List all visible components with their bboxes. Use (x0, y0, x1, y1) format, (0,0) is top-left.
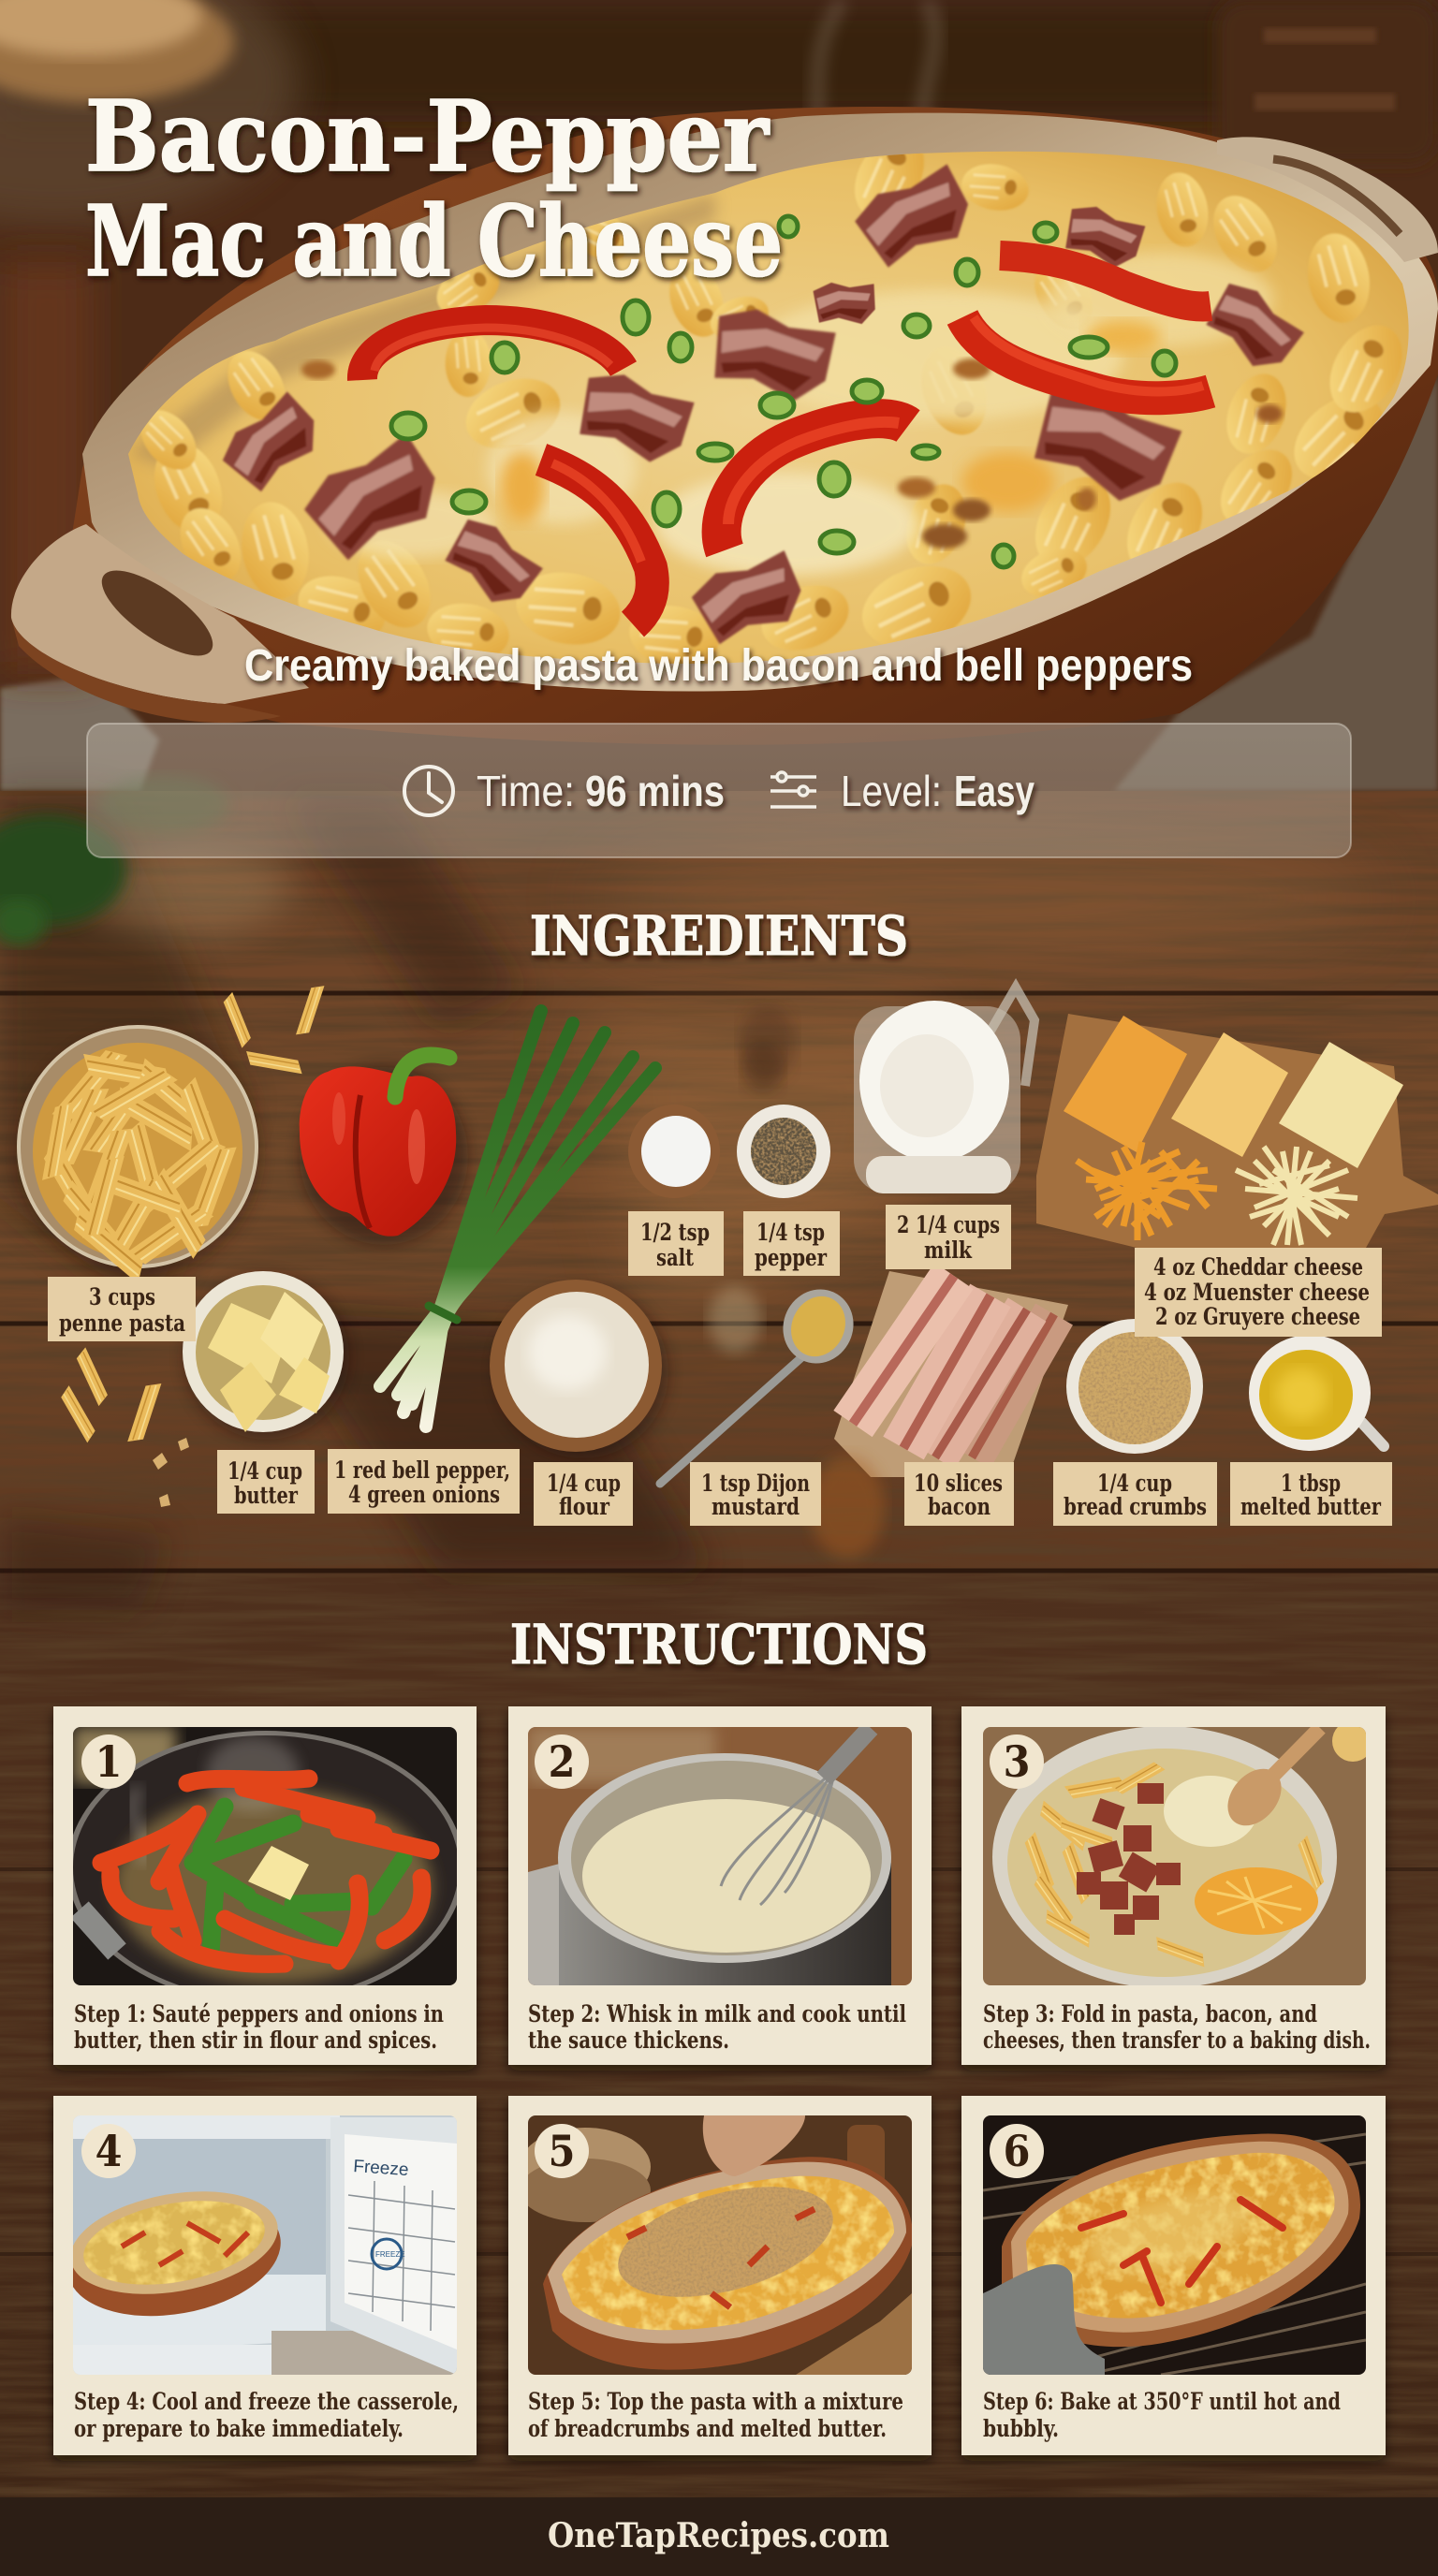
image: topping (520, 2115, 913, 2375)
caption: step 4 (74, 2388, 459, 2442)
badge 5: 5 (549, 2126, 575, 2176)
panel: step 2 (508, 1706, 932, 2065)
subtitle: Creamy baked pasta with bacon and bell peppers (244, 641, 1193, 691)
panel: step 1 (53, 1706, 477, 2065)
title (85, 79, 783, 299)
ingredient: cheese board (1036, 1014, 1438, 1248)
label: pepper: 1/4 tsp (756, 1219, 825, 1246)
label: bacon: 10 slices (914, 1470, 1003, 1497)
label: cheeses: 4 oz Cheddar cheese (1153, 1253, 1363, 1281)
badge 4: 4 (95, 2126, 122, 2176)
caption: step 5: Step 5: Top the pasta with a mixture (528, 2388, 903, 2415)
caption: step 1: Step 1: Sauté peppers and onions in (74, 2000, 444, 2027)
label: butter (217, 1450, 315, 1514)
handle left (11, 524, 309, 704)
label: butter: 1/4 cup (227, 1457, 302, 1485)
badge 6 (990, 2124, 1044, 2178)
label: pepper (743, 1211, 840, 1276)
panel: step 4 (53, 2096, 477, 2455)
muenster block (1171, 1032, 1288, 1157)
badge 3 (990, 1734, 1044, 1789)
step number badges (81, 1734, 1044, 2178)
ingredient: bread crumbs (1066, 1319, 1203, 1454)
level: Easy (954, 767, 1034, 815)
step captions (74, 2000, 1371, 2442)
badge 2: 2 (549, 1736, 575, 1787)
image: oven (983, 2115, 1366, 2375)
baked dish (11, 107, 1438, 745)
calendar: Freeze (353, 2157, 409, 2180)
panel: step 6 (961, 2096, 1386, 2455)
ingredient: green onions (380, 1011, 655, 1427)
title: Bacon-Pepper (85, 79, 770, 194)
badge 5 (535, 2124, 589, 2178)
level: Level: (841, 767, 942, 815)
label: penne (48, 1277, 196, 1341)
dish rim (82, 113, 1438, 691)
label: cheeses: 2 oz Gruyere cheese (1155, 1303, 1360, 1330)
ingredient: flour (490, 1280, 668, 1458)
time (477, 767, 725, 815)
image: pan (67, 1727, 464, 2004)
caption: step 5 (528, 2388, 903, 2442)
ingredient: melted butter (1249, 1335, 1384, 1451)
label: bread crumbs: bread crumbs (1064, 1493, 1207, 1520)
ingredient: pepper (737, 1041, 830, 1198)
caption: step 4: or prepare to bake immediately. (74, 2415, 404, 2442)
label: cheeses (1135, 1248, 1382, 1337)
caption: step 1 (74, 2000, 444, 2054)
label: bacon: bacon (928, 1493, 990, 1520)
badge 1 (81, 1734, 136, 1789)
label: bread crumbs: 1/4 cup (1097, 1470, 1172, 1497)
footer: OneTapRecipes.com (548, 2516, 889, 2555)
label: milk (886, 1205, 1011, 1269)
caption: step 6 (983, 2388, 1341, 2442)
cheddar block (1064, 1016, 1187, 1152)
caption: step 2: Step 2: Whisk in milk and cook until (528, 2000, 906, 2027)
heading: ingredients: INGREDIENTS (530, 904, 908, 968)
label: bread crumbs (1053, 1462, 1217, 1526)
badge 2 (535, 1734, 589, 1789)
label: pepper and onions: 1 red bell pepper, (334, 1456, 510, 1484)
ingredient: bell pepper (300, 1055, 468, 1245)
time: 96 mins (585, 767, 725, 815)
label: mustard (690, 1462, 821, 1526)
image: freezer (58, 2115, 457, 2375)
label: pepper and onions: 4 green onions (348, 1481, 500, 1508)
label: pepper and onions (328, 1449, 520, 1514)
label: penne: penne pasta (59, 1310, 185, 1337)
caption: step 1: butter, then stir in flour and spices. (74, 2027, 437, 2054)
label: melted butter: melted butter (1240, 1493, 1382, 1520)
label: milk: milk (924, 1237, 972, 1264)
icon: clock (404, 767, 453, 815)
ingredient: butter (183, 1271, 349, 1440)
image: saucepan (528, 1727, 912, 1985)
title: Mac and Cheese (85, 183, 783, 299)
label: butter: butter (234, 1482, 299, 1509)
label: pepper: pepper (755, 1244, 828, 1271)
badge 4 (81, 2124, 136, 2178)
caption: step 6: Step 6: Bake at 350°F until hot and (983, 2388, 1341, 2415)
caption: step 2 (528, 2000, 906, 2054)
label: flour (534, 1462, 633, 1526)
label: milk: 2 1/4 cups (897, 1211, 1000, 1238)
ingredient: bacon (834, 1271, 1068, 1477)
caption: step 3: cheeses, then transfer to a baking dish. (983, 2027, 1371, 2054)
ingredient: salt (628, 1105, 720, 1198)
ingredient: mustard (660, 1278, 865, 1484)
panel: step 3 (961, 1706, 1386, 2065)
ingredient: penne bowl (19, 1027, 260, 1283)
caption: step 4: Step 4: Cool and freeze the casserole, (74, 2388, 459, 2415)
label: salt: 1/2 tsp (640, 1219, 710, 1246)
shredded white cheese (1236, 1147, 1357, 1245)
caption: step 6: bubbly. (983, 2415, 1059, 2442)
heading: instructions: INSTRUCTIONS (510, 1613, 928, 1676)
caption: step 5: of breadcrumbs and melted butter. (528, 2415, 887, 2442)
spice dust (740, 1006, 885, 1559)
caption: step 3 (983, 2000, 1371, 2054)
caption: step 3: Step 3: Fold in pasta, bacon, and (983, 2000, 1317, 2027)
label: salt (628, 1211, 724, 1276)
footer (0, 2497, 1438, 2576)
dish body (56, 107, 1438, 745)
badge 1: 1 (95, 1736, 122, 1787)
label: mustard: 1 tsp Dijon (701, 1470, 810, 1497)
label: penne: 3 cups (89, 1283, 155, 1310)
gruyere block (1279, 1042, 1403, 1168)
time: Time: (477, 767, 575, 815)
ingredient labels (48, 1205, 1392, 1526)
background: wood table for ingredients (0, 775, 1438, 2499)
image: mixing bowl (983, 1720, 1373, 1988)
caption: step 2: the sauce thickens. (528, 2027, 729, 2054)
calendar (348, 2157, 455, 2331)
label: bacon (904, 1462, 1014, 1526)
label: flour: 1/4 cup (547, 1470, 621, 1497)
label: melted butter (1230, 1462, 1392, 1526)
label: flour: flour (559, 1493, 610, 1520)
level (841, 767, 1034, 815)
handle right (1217, 137, 1438, 262)
label: mustard: mustard (712, 1493, 800, 1520)
badge 3: 3 (1004, 1736, 1030, 1787)
background: hero table (0, 0, 1438, 805)
label: salt: salt (656, 1244, 695, 1271)
info bar (87, 724, 1351, 857)
loose penne (58, 982, 324, 1507)
icon: sliders (770, 772, 816, 807)
badge 6: 6 (1004, 2126, 1030, 2176)
calendar: FREEZE (375, 2250, 405, 2259)
label: melted butter: 1 tbsp (1281, 1470, 1341, 1497)
cheese surface (128, 152, 1409, 664)
shredded cheddar (1077, 1142, 1217, 1240)
panel: step 5 (508, 2096, 932, 2455)
label: cheeses: 4 oz Muenster cheese (1144, 1279, 1370, 1306)
ingredient: milk jug (854, 988, 1034, 1193)
